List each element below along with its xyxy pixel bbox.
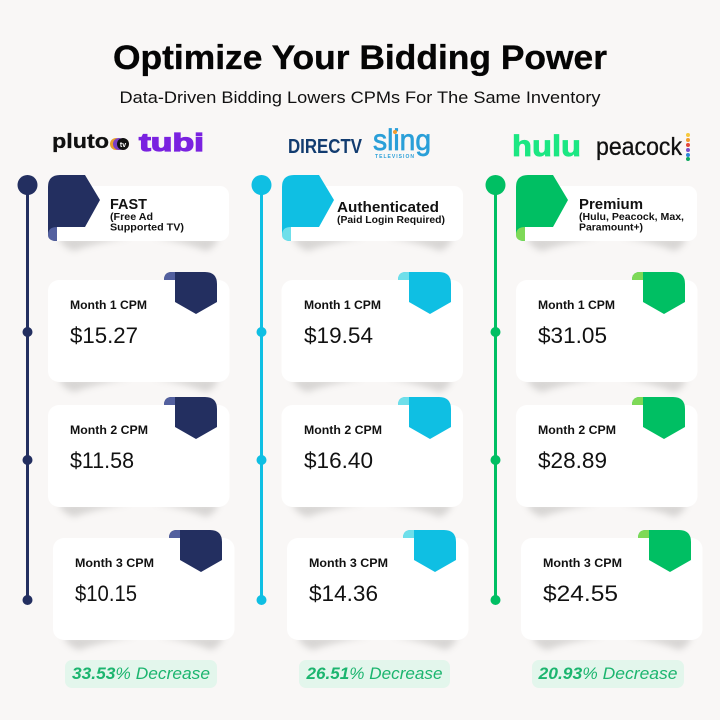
card: FAST month 1: Month 1 CPM: [70, 298, 147, 312]
logo: pluto tv: tv: [120, 142, 126, 149]
decrease badge: Premium: [532, 660, 684, 688]
header card: Premium: [516, 175, 697, 251]
card: Authenticated month 3: [287, 530, 468, 650]
subtitle: Data-Driven Bidding Lowers CPMs For The Same Inventory: [120, 89, 601, 107]
card: FAST month 2: $11.58: [70, 448, 134, 473]
panel: FAST column: [18, 129, 234, 688]
card: Premium month 3: Month 3 CPM: [543, 556, 622, 570]
panel: Authenticated column: [252, 124, 468, 688]
panel: Premium column: [486, 130, 702, 688]
card: FAST month 3: Month 3 CPM: [75, 556, 154, 570]
logo: DirecTV: DIRECTV: [288, 136, 363, 158]
card: Authenticated month 3: $14.36: [309, 581, 378, 606]
card: FAST month 1: $15.27: [70, 323, 138, 348]
logo: Sling: sling: [373, 124, 431, 157]
header card: FAST: [48, 175, 229, 251]
card: Authenticated month 1: $19.54: [304, 323, 373, 348]
header card: FAST: FAST: [110, 197, 147, 213]
card: Authenticated month 1: [282, 272, 463, 392]
header card: FAST: Supported TV): [110, 222, 184, 234]
logo: pluto tv: pluto: [52, 131, 109, 153]
title: Optimize Your Bidding Power: [113, 39, 607, 77]
decrease badge: Authenticated: [299, 660, 450, 688]
decrease badge: Premium: 20.93% Decrease: [537, 665, 678, 683]
card: FAST month 3: $10.15: [75, 581, 137, 606]
header card: Authenticated: [282, 175, 463, 251]
header card: Premium: (Hulu, Peacock, Max,: [579, 212, 684, 223]
card: Authenticated month 2: Month 2 CPM: [304, 423, 382, 437]
card: Premium month 1: $31.05: [538, 323, 607, 348]
card: Premium month 2: $28.89: [538, 448, 607, 473]
header card: Premium: Paramount+): [579, 222, 643, 234]
card: Authenticated month 1: Month 1 CPM: [304, 298, 381, 312]
header card: Authenticated: Authenticated: [337, 200, 439, 216]
card: FAST month 2: [48, 397, 230, 517]
card: Premium month 2: Month 2 CPM: [538, 423, 616, 437]
card: Authenticated month 2: [282, 397, 463, 517]
card: FAST month 2: Month 2 CPM: [70, 423, 148, 437]
decrease badge: FAST: [65, 660, 217, 688]
card: FAST month 3: [53, 530, 234, 650]
card: Premium month 1: Month 1 CPM: [538, 298, 615, 312]
decrease badge: FAST: 33.53% Decrease: [72, 665, 210, 683]
card: Premium month 3: [521, 530, 702, 650]
logo: hulu: hulu: [512, 130, 581, 163]
card: FAST month 1: [48, 272, 230, 392]
card: Premium month 2: [516, 397, 698, 517]
logo: pluto tv: [52, 131, 129, 153]
header card: FAST: (Free Ad: [110, 212, 153, 223]
card: Authenticated month 2: $16.40: [304, 448, 373, 473]
decrease badge: Authenticated: 26.51% Decrease: [305, 665, 442, 683]
timeline: [252, 175, 272, 605]
timeline: [18, 175, 38, 605]
card: Premium month 1: [516, 272, 698, 392]
logo: tubi: tubi: [139, 129, 204, 157]
card: Premium month 3: $24.55: [543, 581, 618, 606]
timeline: [486, 175, 506, 605]
logo: Sling: TELEVISION: [375, 154, 414, 160]
header card: Authenticated: (Paid Login Required): [337, 215, 445, 226]
logo: peacock: peacock: [596, 133, 682, 161]
header card: Premium: Premium: [579, 197, 643, 213]
card: Authenticated month 3: Month 3 CPM: [309, 556, 388, 570]
